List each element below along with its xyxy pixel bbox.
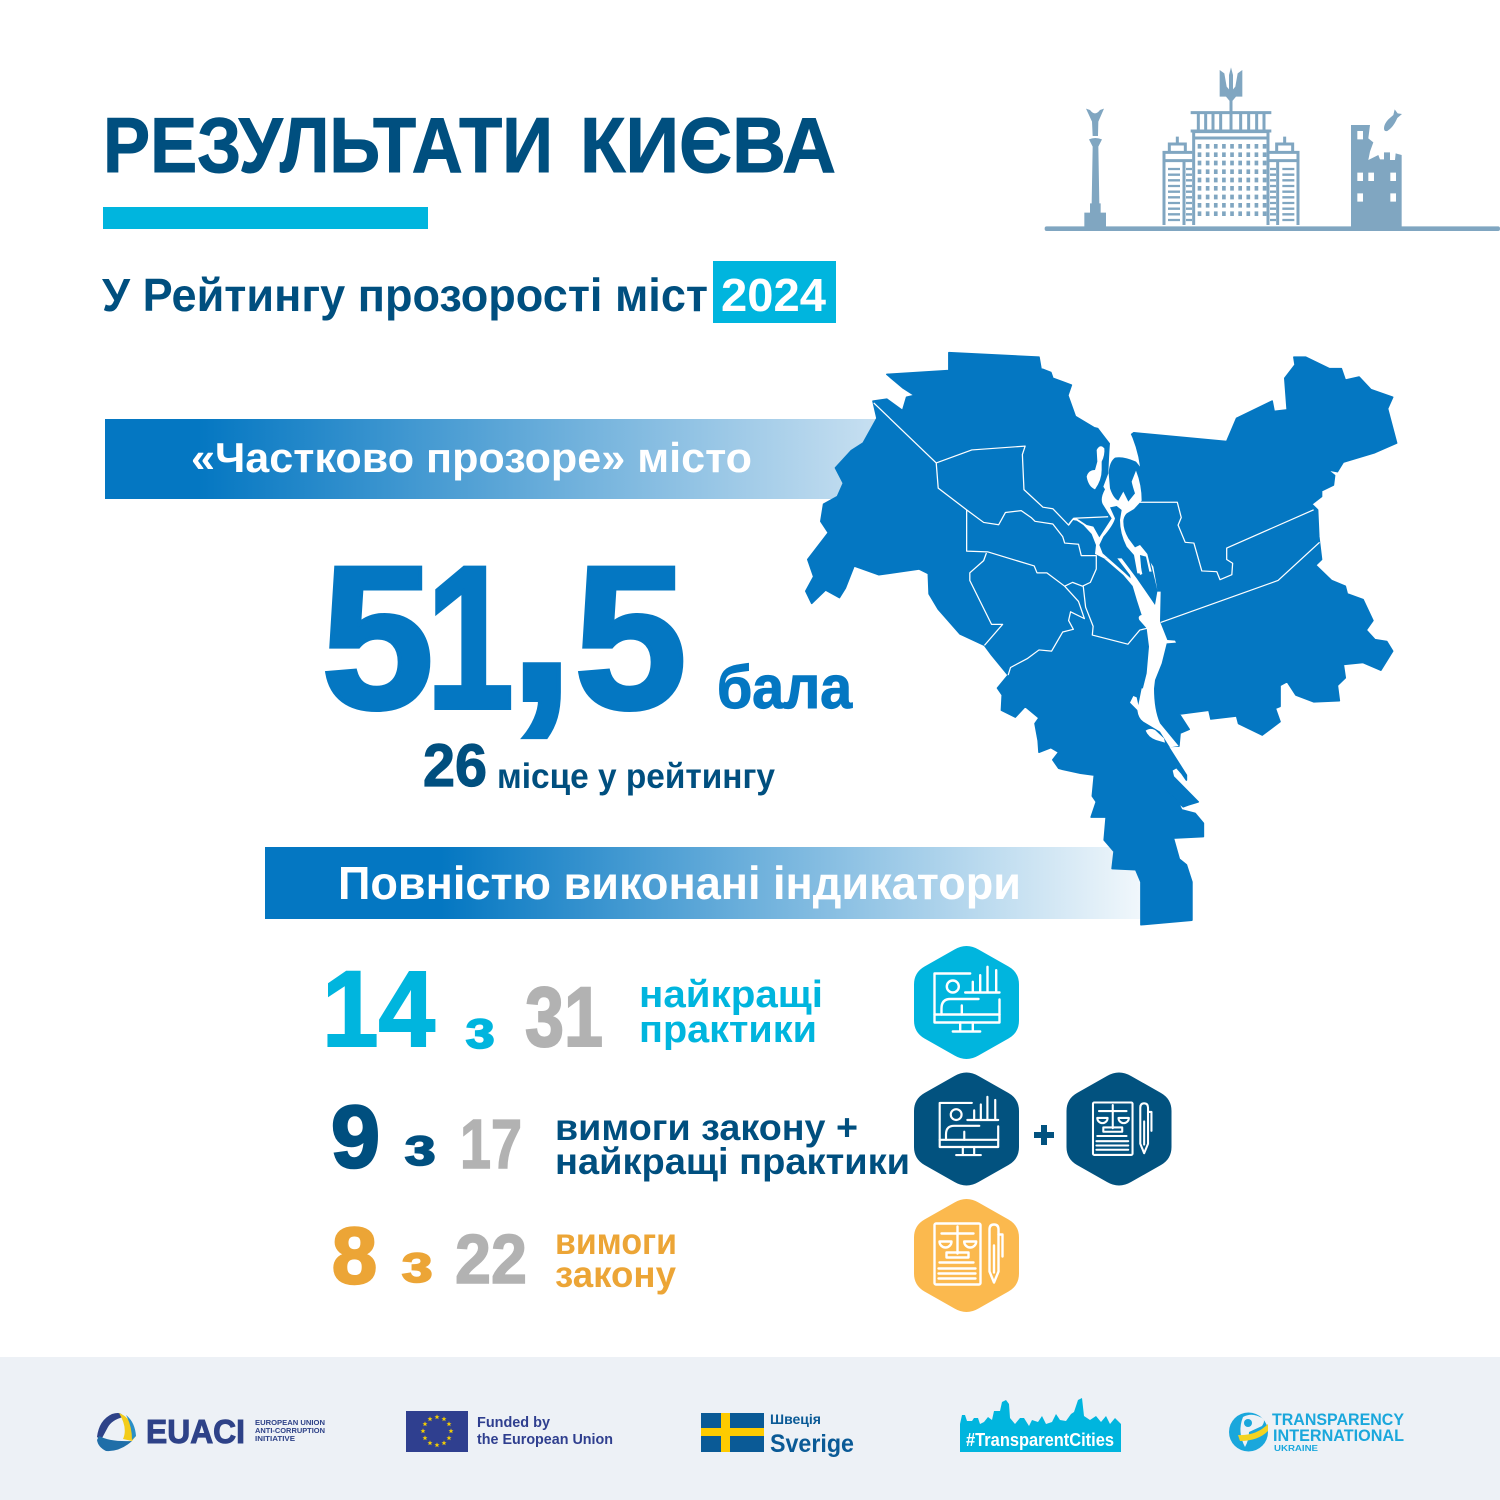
logo: Transparency International Ukraine: TRANSPARENCY — [1272, 1410, 1405, 1429]
icon: practices hexagon — [914, 1072, 1019, 1186]
icon: plus sign — [1034, 1125, 1054, 1145]
indicator row: law and best practices: 9 — [331, 1087, 380, 1186]
banner: fully completed indicators — [265, 847, 1145, 919]
logo: Sweden: Швеція — [770, 1411, 821, 1427]
rank: 26th place: місце у рейтингу — [497, 757, 776, 796]
icon: falling bomb — [1384, 109, 1402, 131]
logo: Funded by the European Union: the European Union — [477, 1432, 613, 1448]
map: city outline with district borders — [806, 353, 1397, 925]
indicator row: best practices: з — [465, 1000, 495, 1060]
indicator row: law requirements: 22 — [455, 1220, 527, 1298]
subtitle: У Рейтингу прозорості міст — [102, 269, 708, 321]
logo: Sweden: Sverige — [770, 1430, 854, 1458]
indicator row: law requirements: з — [401, 1234, 433, 1294]
icon: government building — [1164, 67, 1298, 225]
score: 51,5 points — [321, 483, 853, 752]
indicator row: law requirements: 8 — [332, 1211, 377, 1300]
map: southern Dnipro — [1130, 688, 1179, 747]
logo: Transparency International Ukraine: INTERNATIONAL — [1273, 1426, 1404, 1445]
banner: fully completed indicators: Повністю виконані індикатори — [338, 857, 1021, 909]
logo: TransparentCities — [960, 1398, 1121, 1452]
indicator row: best practices: 31 — [525, 970, 603, 1064]
rank: 26th place: 26 — [423, 732, 487, 799]
logo: EUACI: ANTI-CORRUPTION — [255, 1426, 325, 1435]
indicator row: law and best practices: 17 — [460, 1105, 522, 1183]
logo: EUACI: EUROPEAN UNION — [255, 1418, 325, 1427]
map of Kyiv — [806, 353, 1397, 925]
icon: ruined building — [1351, 109, 1402, 227]
logo: Funded by the European Union — [406, 1411, 613, 1452]
logo: EUACI — [97, 1413, 325, 1451]
title accent bar — [103, 207, 428, 229]
logo: TransparentCities: #TransparentCities — [966, 1430, 1114, 1450]
logo: EUACI: EUACI — [146, 1413, 245, 1450]
banner: partially transparent city: «Частково прозоре» місто — [191, 434, 752, 481]
score: 51,5 points: бала — [717, 654, 853, 721]
footer — [0, 1357, 1500, 1500]
logo: Transparency International Ukraine — [1229, 1410, 1405, 1453]
score: 51,5 points: 5 — [574, 524, 687, 752]
indicator row: law and best practices: вимоги закону + — [555, 1107, 858, 1148]
indicator row: law requirements: вимоги — [555, 1221, 677, 1262]
indicator row: best practices — [322, 946, 1019, 1069]
logo: EUACI: INITIATIVE — [255, 1434, 295, 1443]
indicator row: law and best practices — [331, 1072, 1172, 1186]
icon: best practices hexagon — [914, 946, 1019, 1059]
indicator row: law and best practices: з — [404, 1117, 436, 1177]
score: 51,5 points: , — [508, 483, 575, 751]
logo: Sweden — [701, 1411, 854, 1458]
indicator row: best practices: практики — [639, 1009, 817, 1051]
ground line — [1045, 226, 1500, 231]
logo: Funded by the European Union: Funded by — [477, 1415, 550, 1431]
icon: law requirements hexagon — [914, 1199, 1019, 1312]
icon: trident — [1220, 67, 1242, 103]
logo: Transparency International Ukraine: UKRAINE — [1274, 1444, 1319, 1453]
banner: partially transparent city — [105, 419, 880, 499]
rank: 26th place — [423, 732, 776, 799]
subtitle: 2024 — [721, 269, 826, 321]
icon: law hexagon — [1066, 1072, 1172, 1186]
title: КИЄВА — [580, 101, 836, 189]
score: 51,5 points: 1 — [426, 524, 514, 752]
title — [103, 101, 836, 189]
indicator row: law requirements: закону — [555, 1254, 676, 1295]
indicator row: best practices: 14 — [322, 948, 435, 1069]
indicator row: law requirements — [332, 1199, 1019, 1312]
indicator row: law and best practices: найкращі практики — [555, 1141, 910, 1182]
indicator row: best practices: найкращі — [639, 974, 823, 1016]
icon: independence monument — [1084, 109, 1106, 227]
map: central Dnipro — [1104, 558, 1176, 700]
icon: Kyiv skyline — [1045, 67, 1500, 231]
title: РЕЗУЛЬТАТИ — [103, 101, 553, 189]
score: 51,5 points: 5 — [321, 524, 434, 752]
map: northern Dnipro channels — [1067, 426, 1152, 573]
